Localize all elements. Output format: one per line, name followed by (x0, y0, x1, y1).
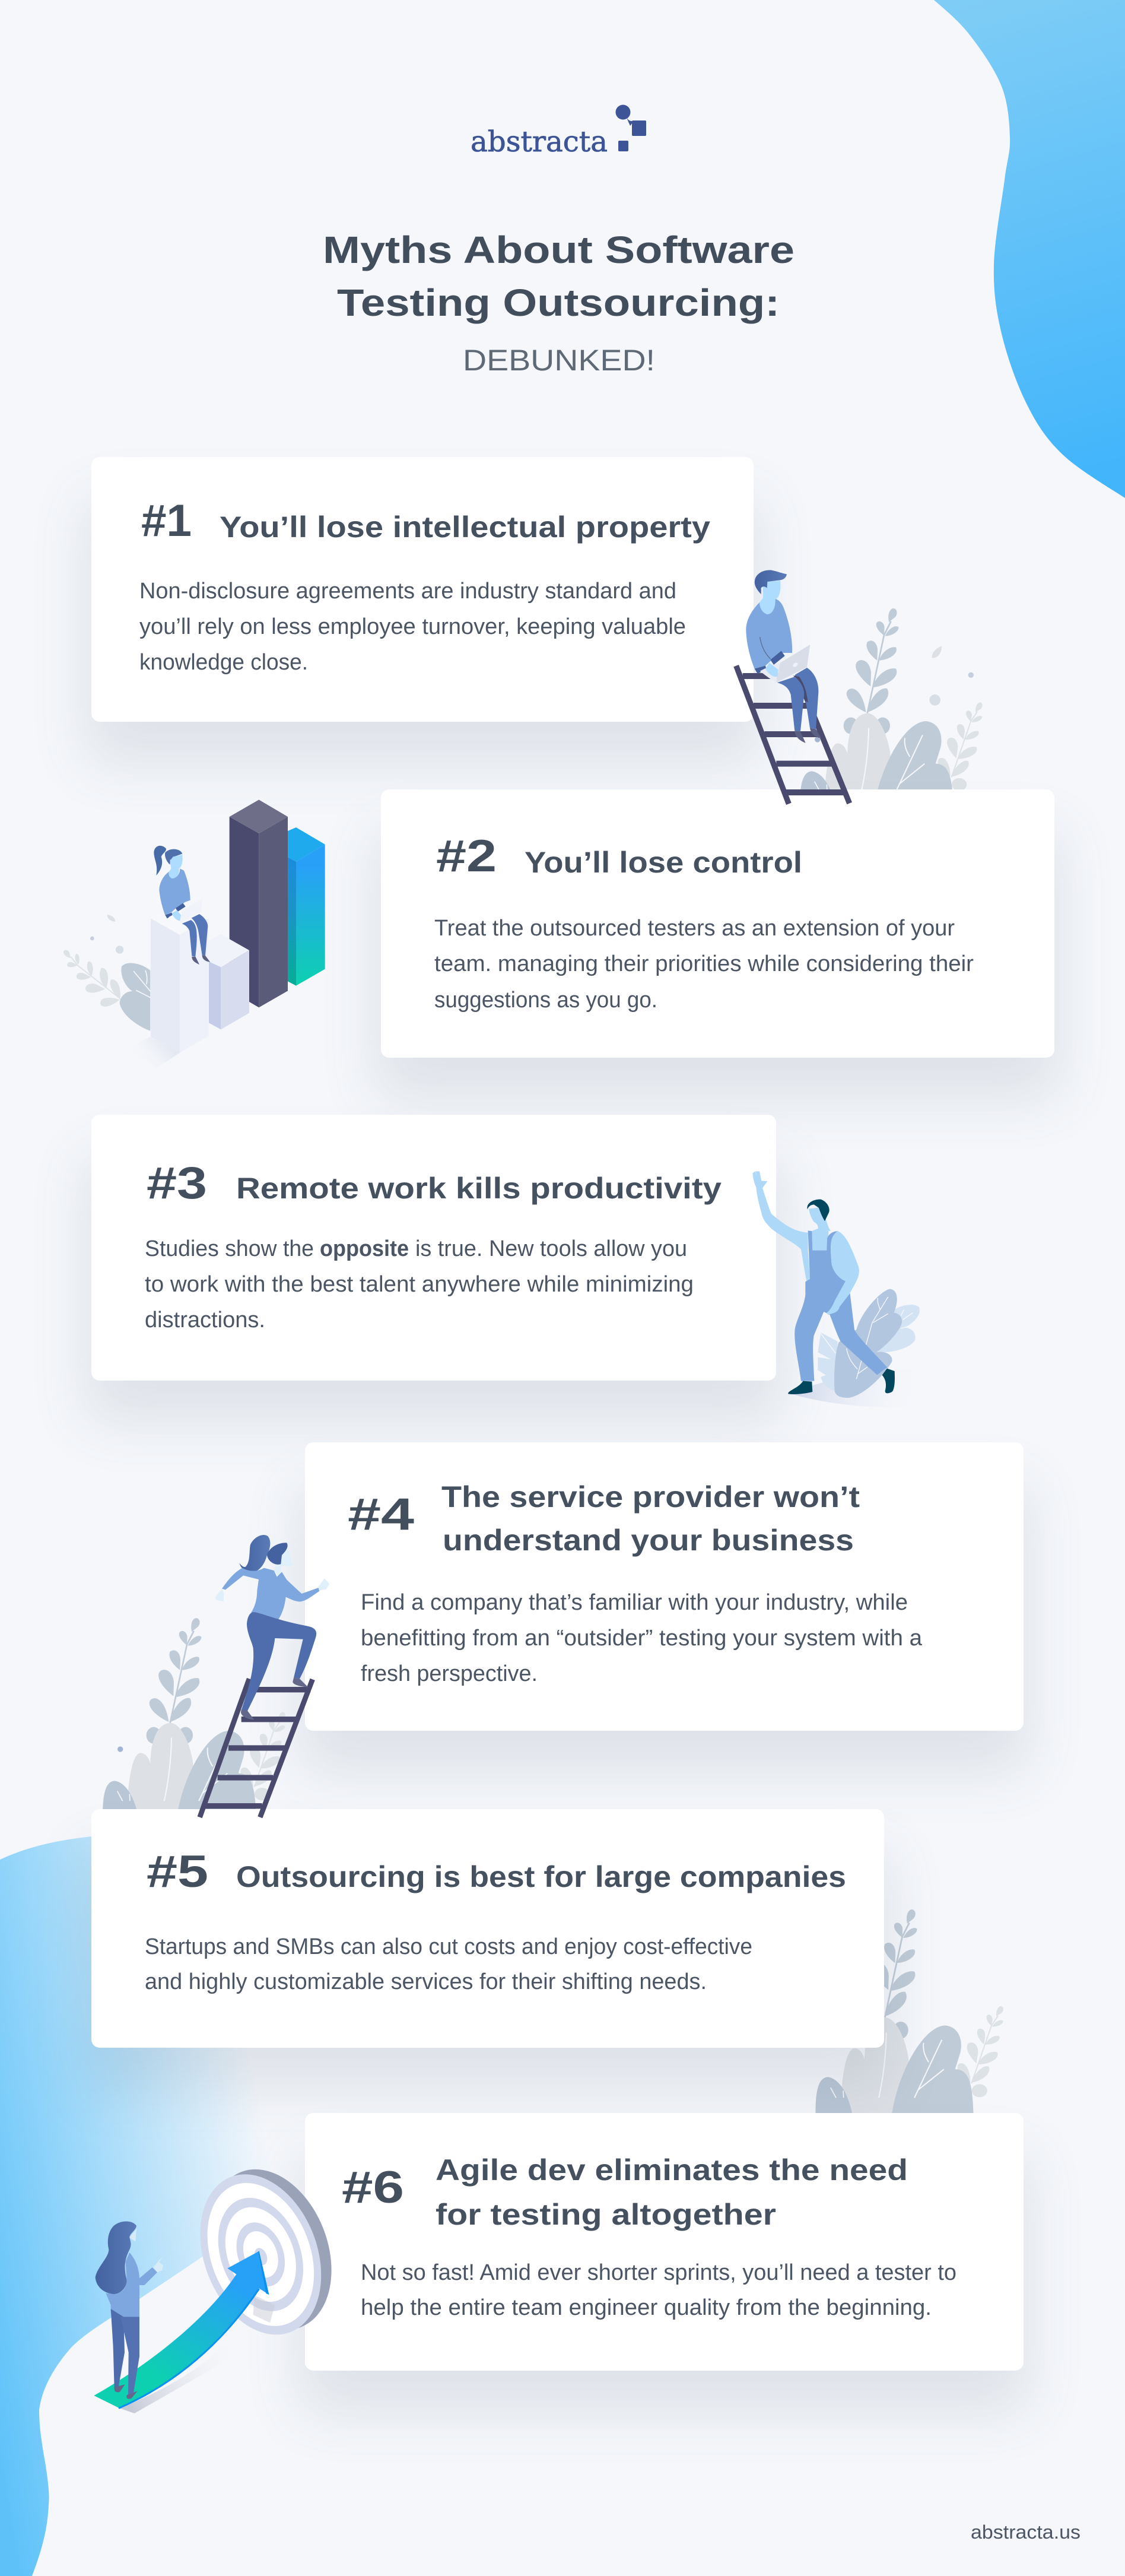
body 6 (361, 2260, 956, 2320)
body 1: knowledge close. (139, 650, 308, 675)
subtitle: DEBUNKED! (463, 344, 655, 377)
plant (49, 915, 150, 1031)
panel: myth 6 (299, 2113, 1029, 2412)
body 2: team. managing their priorities while considering their (434, 951, 974, 976)
heading 3: Remote work kills productivity (236, 1172, 722, 1205)
panel: myth 1 (85, 457, 759, 763)
bar: tall light (151, 902, 209, 1052)
number 6: #6 (342, 2162, 404, 2213)
ladder (200, 1679, 313, 1817)
woman (96, 2221, 163, 2399)
heading 1: You’ll lose intellectual property (220, 510, 710, 544)
number 3: #3 (147, 1158, 207, 1208)
bar: dark (230, 800, 288, 1007)
title: Myths About Software (323, 229, 795, 271)
body 2 (434, 916, 974, 1013)
body 1: you’ll rely on less employee turnover, keeping valuable (139, 614, 686, 639)
illustration: woman, arrow and target (94, 2152, 354, 2413)
target (178, 2152, 354, 2352)
heading 6: Agile dev eliminates the need (436, 2153, 908, 2187)
illustration: woman climbing ladder (200, 1535, 329, 1817)
arrow (94, 2251, 269, 2408)
body 3: to work with the best talent anywhere while minimizing (145, 1272, 694, 1297)
body 4 (361, 1590, 923, 1686)
bar: small light (209, 934, 249, 1029)
body 1 (139, 579, 686, 675)
leaves (818, 1289, 920, 1398)
body 5: Startups and SMBs can also cut costs and enjoy cost-effective (145, 1934, 752, 1959)
ground shadow (126, 1037, 180, 1068)
body 4: Find a company that’s familiar with your industry, while (361, 1590, 908, 1615)
blob: bottom left (0, 1804, 332, 2576)
number 1: #1 (141, 496, 192, 546)
body 3: Studies show the (145, 1236, 314, 1261)
number 5: #5 (147, 1847, 208, 1897)
illustration: man in overalls waving (752, 1171, 933, 1407)
body 4: benefitting from an “outsider” testing your system with a (361, 1626, 923, 1651)
icon: plant behind myth 2 (800, 608, 984, 813)
body 6: help the entire team engineer quality from the beginning. (361, 2295, 932, 2320)
number 4: #4 (348, 1489, 414, 1540)
body 5: and highly customizable services for their shifting needs. (145, 1969, 707, 1994)
woman (215, 1535, 329, 1720)
woman (154, 846, 210, 965)
body 3: is true. New tools allow you (415, 1236, 687, 1261)
body 3 (145, 1236, 694, 1333)
heading 6 (436, 2153, 908, 2231)
footer url: abstracta.us (971, 2521, 1080, 2543)
body 3: opposite (320, 1236, 409, 1261)
logo wordmark: abstracta (471, 125, 608, 158)
body 1: Non-disclosure agreements are industry standard and (139, 579, 676, 604)
logo (471, 104, 646, 158)
title: Testing Outsourcing: (337, 281, 780, 324)
body 3: distractions. (145, 1308, 265, 1333)
heading 2: You’ll lose control (525, 846, 802, 879)
bar: blue gradient (288, 827, 325, 986)
panel: myth 4 (299, 1442, 1029, 1772)
body 5 (145, 1934, 752, 1994)
body 4: fresh perspective. (361, 1661, 538, 1686)
title (323, 229, 795, 324)
floor shadow (791, 1370, 933, 1407)
heading 5: Outsourcing is best for large companies (236, 1860, 846, 1893)
heading 6: for testing altogether (436, 2198, 776, 2231)
blob: top right (934, 0, 1125, 498)
body 2: suggestions as you go. (434, 988, 657, 1013)
body 6: Not so fast! Amid ever shorter sprints, you’ll need a tester to (361, 2260, 956, 2285)
man (752, 1171, 895, 1394)
illustration: man with laptop on ladder (736, 570, 850, 804)
heading 4 (441, 1480, 860, 1557)
panel: myth 2 (375, 789, 1060, 1099)
icon: plant behind myth 5 right (815, 1909, 1005, 2120)
heading 4: The service provider won’t (441, 1480, 860, 1514)
logo mark (616, 104, 646, 151)
panel: myth 3 (85, 1115, 782, 1422)
heading 4: understand your business (443, 1524, 854, 1557)
icon: plant behind myth 5 left (103, 1618, 287, 1823)
body 2: Treat the outsourced testers as an extension of your (434, 916, 955, 941)
man (746, 570, 821, 743)
illustration: woman on bar chart (49, 800, 325, 1068)
ladder (736, 666, 850, 804)
number 2: #2 (436, 831, 497, 881)
arrow shadow (120, 2343, 237, 2413)
panel: myth 5 (85, 1809, 890, 2089)
